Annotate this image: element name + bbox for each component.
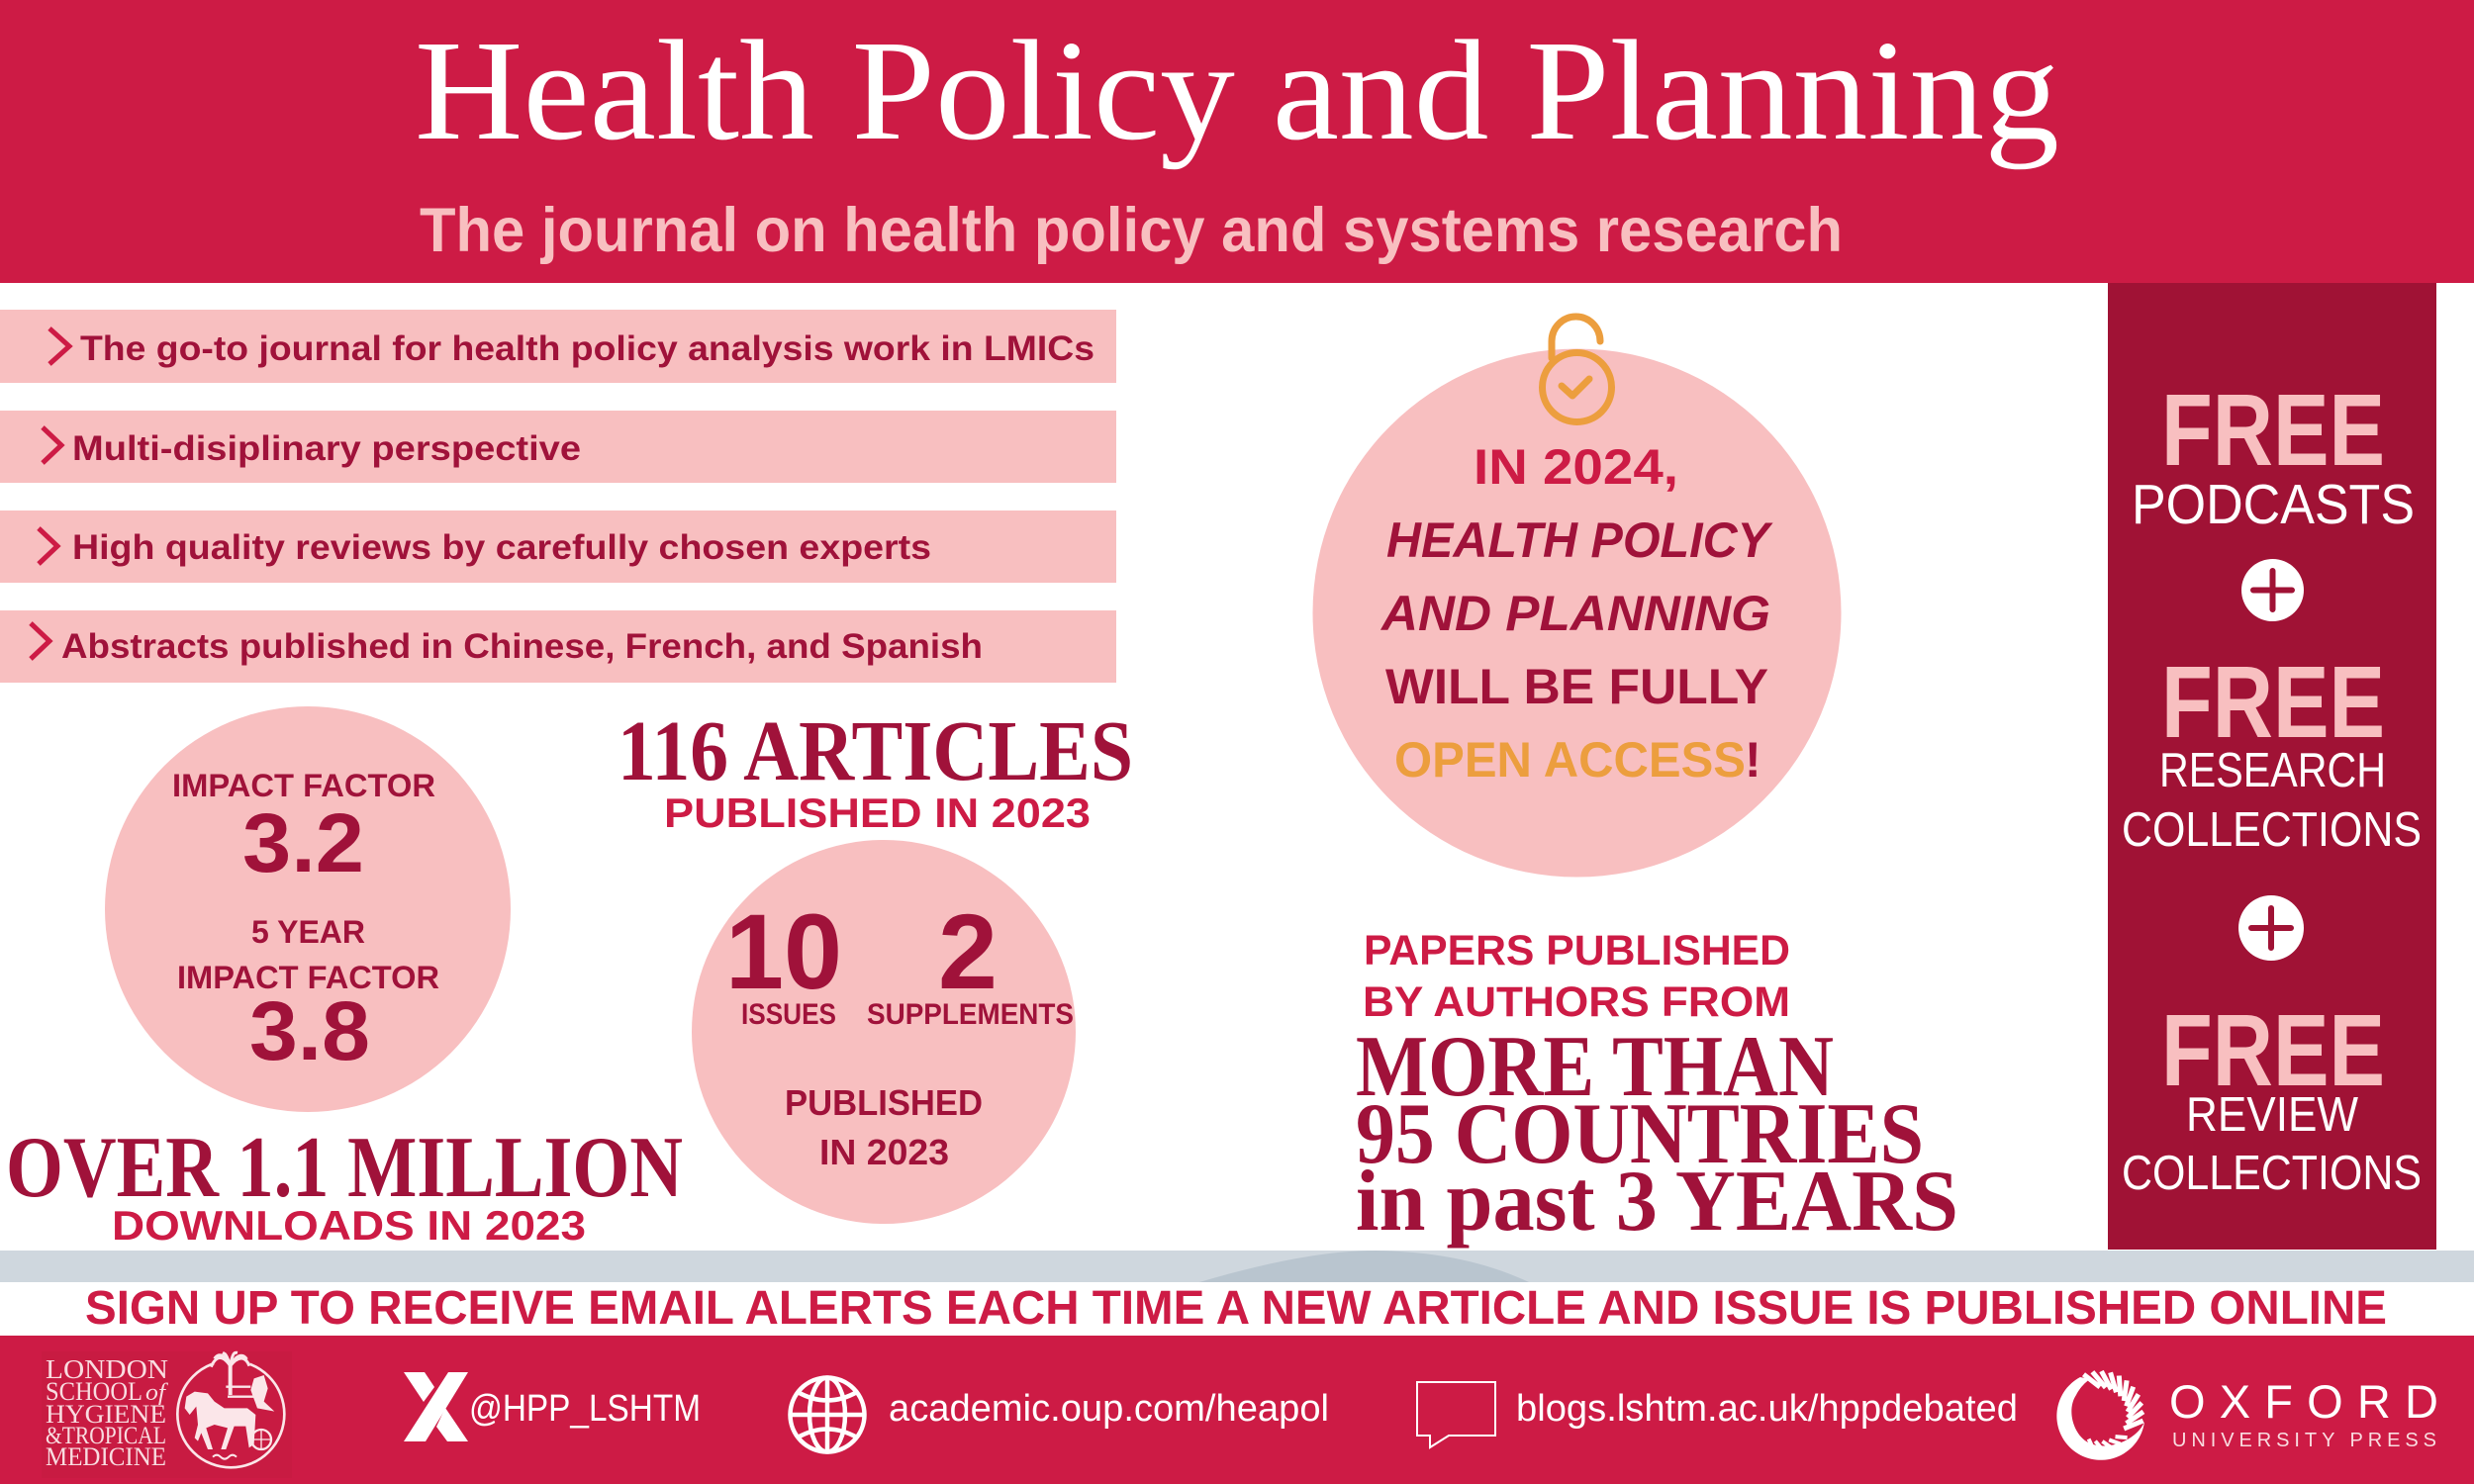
stat: downloads: DOWNLOADS IN 2023: [112, 1202, 586, 1249]
blog address: blogs.lshtm.ac.uk/hppdebated: [1516, 1388, 2018, 1430]
header banner: [0, 0, 2474, 283]
stat: countries: [1356, 927, 1958, 1250]
stat: countries: MORE THAN: [1356, 1019, 1834, 1115]
free podcasts: FREE: [2161, 373, 2385, 487]
supplements label: SUPPLEMENTS: [867, 998, 1074, 1031]
logo: Oxford University Press: [2056, 1371, 2438, 1460]
stat: downloads: OVER 1.1 MILLION: [6, 1120, 683, 1216]
stat: articles: PUBLISHED IN 2023: [664, 789, 1091, 836]
icon: X: [404, 1372, 468, 1441]
logo: LSHTM: of: [145, 1380, 169, 1406]
issues count: 10: [725, 891, 842, 1011]
impact factor value: 3.2: [242, 796, 364, 889]
stat: countries: 95 COUNTRIES: [1356, 1086, 1924, 1182]
free review collections: REVIEW: [2186, 1088, 2359, 1142]
stat: countries: PAPERS PUBLISHED: [1364, 927, 1790, 974]
feature bar: quality reviews: [0, 510, 1116, 583]
free review collections: COLLECTIONS: [2122, 1147, 2422, 1200]
published label: PUBLISHED: [785, 1082, 983, 1123]
feature bar: multi-disciplinary: [0, 411, 1116, 483]
free podcasts: [2132, 373, 2415, 536]
journal website: academic.oup.com/heapol: [889, 1388, 1329, 1430]
open access statement: [1380, 439, 1774, 788]
logo: Oxford University Press: OXFORD: [2169, 1375, 2438, 1428]
logo: LSHTM: MEDICINE: [46, 1442, 166, 1471]
year label: IN 2023: [819, 1132, 949, 1172]
panel: key journal features: [0, 310, 1116, 683]
logo: Oxford University Press: UNIVERSITY PRESS: [2172, 1430, 2436, 1451]
stat: countries: BY AUTHORS FROM: [1363, 978, 1790, 1026]
issues label: ISSUES: [741, 998, 836, 1031]
five year label: 5 YEAR: [251, 914, 365, 950]
supplements count: 2: [938, 891, 998, 1011]
title: Health Policy and Planning: [415, 12, 2059, 170]
logo: LSHTM: SCHOOL: [46, 1377, 143, 1406]
icon: plus: [2241, 559, 2304, 621]
logo: LSHTM: LONDON: [46, 1354, 168, 1384]
feature bar: multi-disciplinary: Multi-disiplinary perspective: [72, 429, 581, 468]
panel: open access circle: [1312, 317, 1841, 877]
panel: issues and supplements circle: [692, 840, 1076, 1224]
icon: open padlock: [1542, 317, 1611, 421]
five year impact factor value: 3.8: [249, 984, 370, 1077]
open access statement: !: [1745, 732, 1761, 788]
icon: globe: [790, 1377, 865, 1452]
open access statement: WILL BE FULLY: [1385, 659, 1768, 714]
panel: free resources sidebar: [2108, 283, 2436, 1250]
free podcasts: PODCASTS: [2132, 473, 2415, 536]
open access statement: HEALTH POLICY: [1386, 512, 1774, 568]
feature bar: translated abstracts: Abstracts published in Chinese, French, and Spanish: [61, 627, 983, 666]
logo: LSHTM: HYGIENE: [46, 1400, 166, 1429]
free research collections: COLLECTIONS: [2122, 803, 2422, 857]
stat: articles: [618, 702, 1133, 836]
free research collections: [2122, 645, 2422, 857]
X handle: @HPP_LSHTM: [469, 1388, 701, 1430]
logo: LSHTM: &TROPICAL: [46, 1423, 166, 1449]
logo: LSHTM: [42, 1351, 292, 1478]
free research collections: FREE: [2161, 645, 2385, 759]
five year impact factor label: IMPACT FACTOR: [177, 960, 439, 995]
open access statement: AND PLANNING: [1380, 586, 1770, 641]
open access statement: IN 2024,: [1474, 439, 1678, 495]
icon: speech bubble: [1417, 1382, 1495, 1447]
stat: countries: in past 3 YEARS: [1356, 1154, 1958, 1250]
feature bar: quality reviews: High quality reviews by carefully chosen experts: [72, 528, 931, 567]
icon: plus: [2238, 895, 2304, 961]
feature bar: go-to journal: The go-to journal for health policy analysis work in LMICs: [80, 329, 1094, 368]
stat: downloads: [6, 1120, 683, 1249]
email sign-up call to action: SIGN UP TO RECEIVE EMAIL ALERTS EACH TIME A NEW ARTICLE AND ISSUE IS PUBLISHED ONLINE: [85, 1282, 2387, 1335]
free review collections: [2122, 993, 2422, 1200]
footer bar: [0, 1336, 2474, 1484]
subtitle: The journal on health policy and systems research: [420, 196, 1843, 265]
impact factor label: IMPACT FACTOR: [172, 768, 435, 803]
free research collections: RESEARCH: [2159, 744, 2386, 797]
open access statement: OPEN ACCESS: [1394, 732, 1746, 788]
feature bar: translated abstracts: [0, 610, 1116, 683]
stat: articles: 116 ARTICLES: [618, 702, 1133, 798]
grey divider band: [0, 1251, 2474, 1282]
free review collections: FREE: [2161, 993, 2385, 1107]
feature bar: go-to journal: [0, 310, 1116, 383]
panel: impact factor circle: [105, 706, 511, 1112]
